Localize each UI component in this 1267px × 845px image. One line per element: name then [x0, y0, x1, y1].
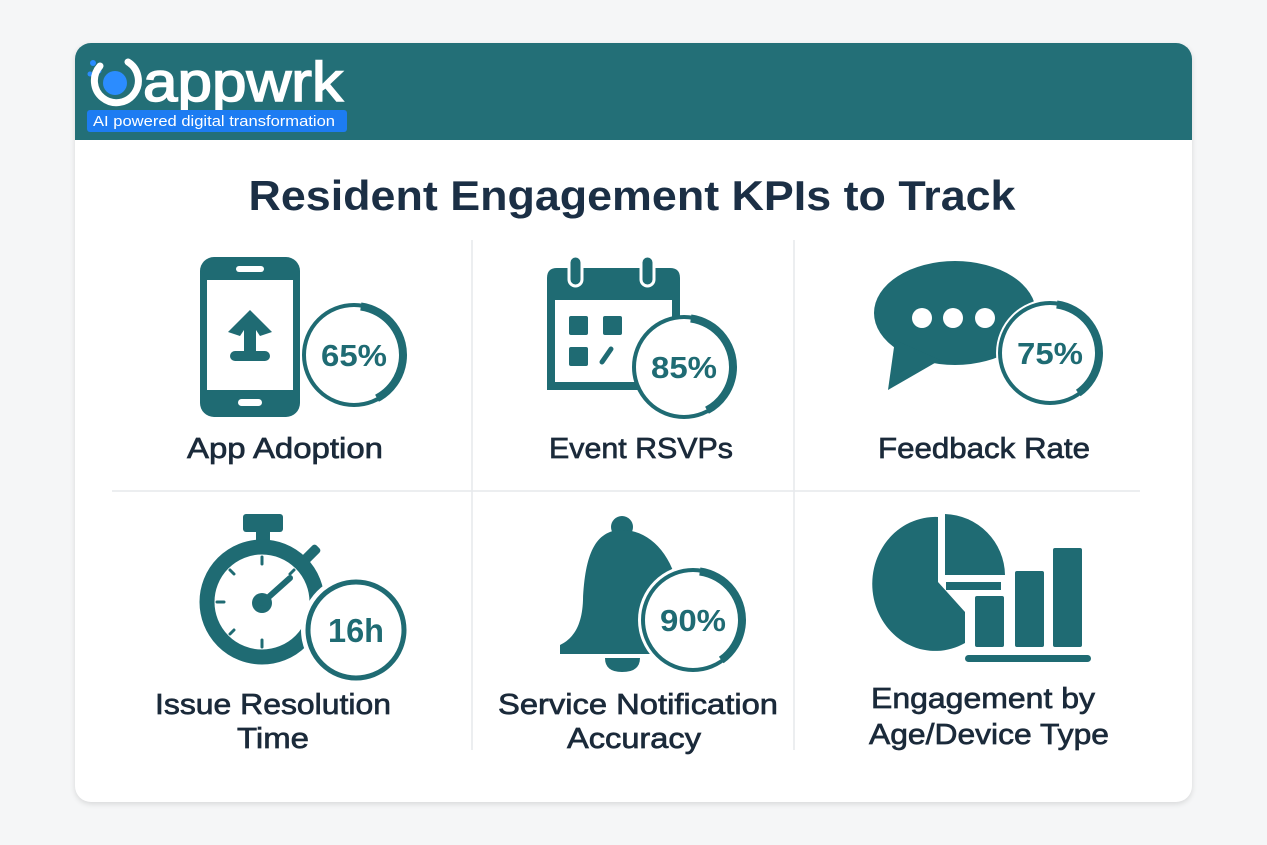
ring 75%: 75% [1017, 336, 1083, 371]
icon: calendar [547, 256, 680, 386]
label: Time [237, 723, 309, 755]
label: Issue Resolution [155, 689, 391, 721]
label: App Adoption [187, 433, 383, 465]
icon: stopwatch [207, 514, 322, 657]
label: Age/Device Type [869, 719, 1109, 751]
ring 90% [638, 565, 748, 675]
card [75, 43, 1192, 802]
kpi: service notification accuracy [498, 516, 778, 755]
ring 90%: 90% [660, 603, 726, 638]
ring 75% [995, 298, 1105, 408]
label: Service Notification [498, 689, 778, 721]
kpi: issue resolution time [155, 514, 411, 755]
label: Feedback Rate [878, 433, 1090, 465]
ring 65% [299, 300, 409, 410]
logo: AI powered digital transformation [93, 113, 335, 130]
ring 16h: 16h [328, 612, 384, 649]
logo [87, 50, 347, 132]
label: Accuracy [567, 723, 702, 755]
header band [75, 43, 1192, 140]
kpi: app adoption [187, 257, 409, 465]
logo: appwrk [143, 50, 344, 113]
dividers [112, 240, 1140, 750]
kpi: engagement by age/device [869, 514, 1109, 751]
icon: pie and bars [872, 514, 1091, 662]
ring 16h [301, 575, 411, 685]
title: Resident Engagement KPIs to Track [248, 172, 1016, 219]
kpi: feedback rate [874, 261, 1105, 465]
ring 85% [629, 312, 739, 422]
ring 85%: 85% [651, 350, 717, 385]
label: Engagement by [871, 683, 1096, 715]
icon: bell [560, 516, 680, 672]
icon: phone [200, 257, 300, 417]
kpi: event rsvps [547, 256, 739, 465]
ring 65%: 65% [321, 338, 387, 373]
label: Event RSVPs [549, 433, 733, 465]
icon: chat bubble [874, 261, 1036, 390]
